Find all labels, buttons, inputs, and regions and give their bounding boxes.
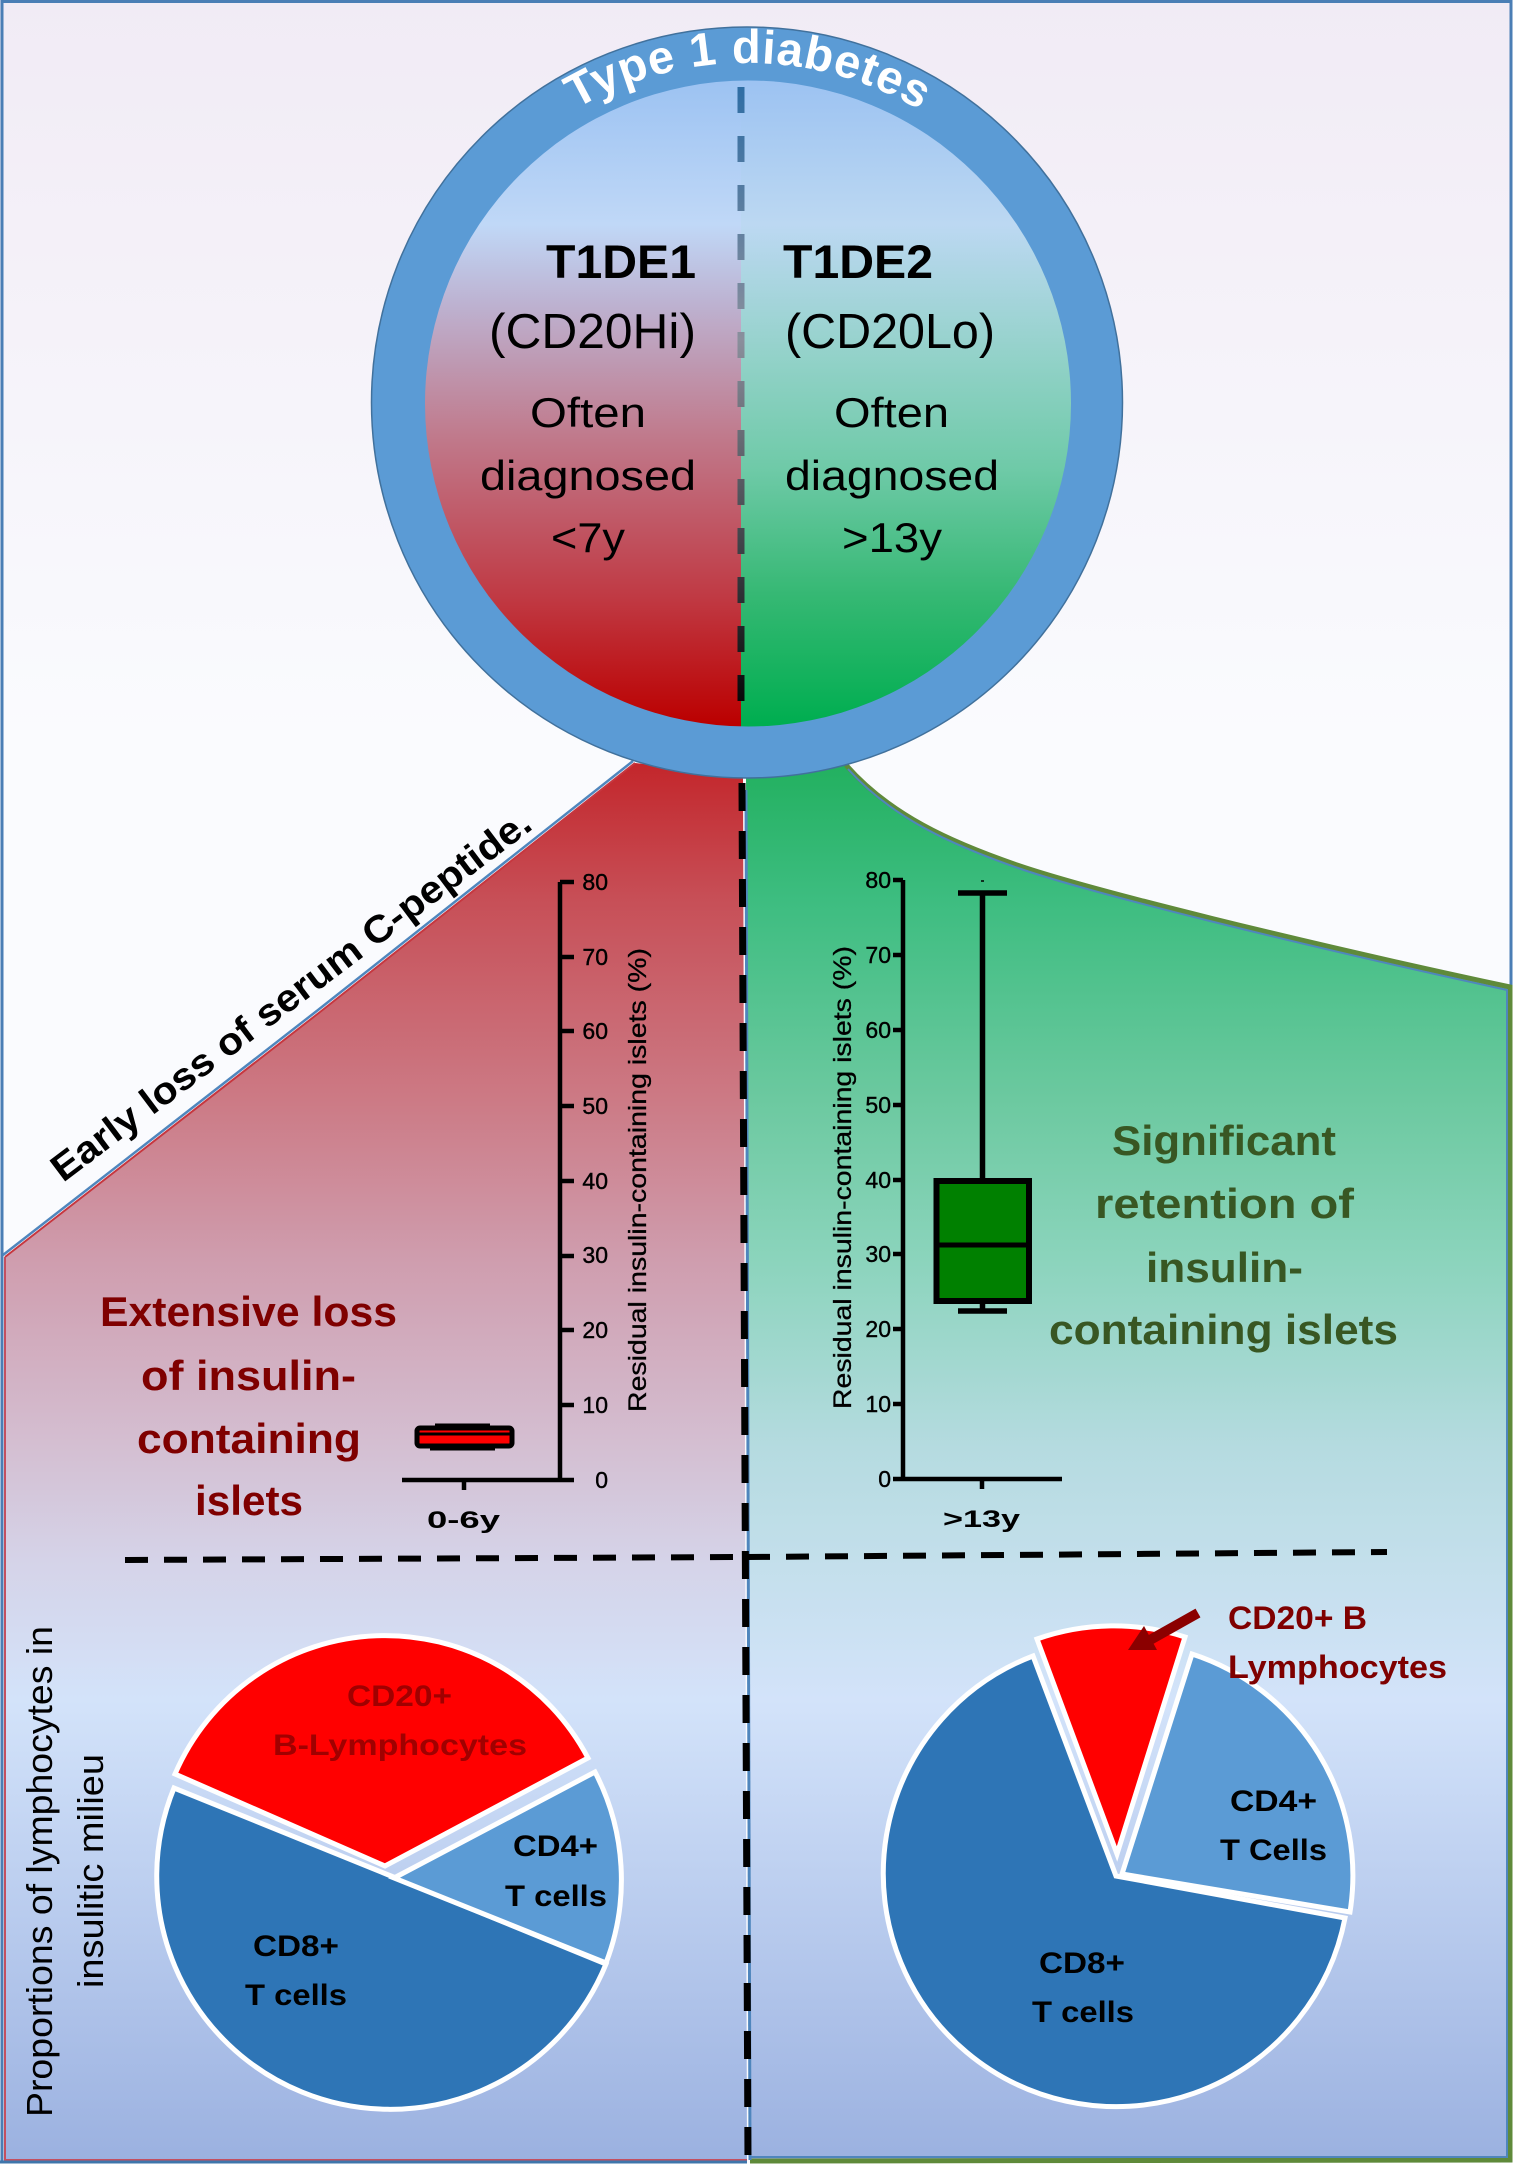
box plot: >13y: Residual insulin-containing islets (%) — [829, 946, 857, 1409]
box plot: >13y: 0 — [878, 1466, 891, 1492]
T1DE2 label: Often — [834, 389, 949, 436]
side label: proportions of lymphocytes: insulitic milieu — [70, 1754, 111, 1988]
pie labels: T1DE2: T cells — [1032, 1996, 1134, 2029]
text: extensive loss: containing — [137, 1415, 361, 1462]
box plot: 0-6y: 80 — [582, 869, 608, 895]
callout: CD20+ B lymphocytes: CD20+ B — [1228, 1600, 1367, 1636]
T1DE2 label: diagnosed — [785, 452, 999, 499]
ring — [372, 27, 1122, 778]
box plot: 0-6y: 10 — [582, 1392, 608, 1418]
pie labels: T1DE1: CD4+ — [513, 1830, 598, 1863]
box plot: 0-6y: 0 — [595, 1467, 608, 1493]
T1DE1 label: diagnosed — [480, 452, 696, 499]
text: significant retention: Significant — [1112, 1117, 1336, 1164]
text: extensive loss: Extensive loss — [100, 1288, 397, 1335]
pie labels: T1DE2: CD8+ — [1039, 1947, 1125, 1980]
callout: CD20+ B lymphocytes: Lymphocytes — [1228, 1649, 1447, 1685]
box plot: >13y — [829, 867, 1062, 1533]
circular title: Type 1 diabetes — [561, 28, 928, 106]
text: extensive loss — [100, 1288, 397, 1524]
text: extensive loss: of insulin- — [141, 1352, 356, 1399]
slice: CD20+ — [175, 1636, 588, 1866]
box plot: >13y: 30 — [865, 1241, 891, 1267]
panel: T1DE1 left — [0, 761, 747, 2162]
T1DE2 label: (CD20Lo) — [785, 305, 995, 359]
text: extensive loss: islets — [195, 1477, 303, 1524]
box plot: >13y: >13y — [943, 1506, 1021, 1533]
T1DE1 label: <7y — [551, 514, 625, 561]
box plot: 0-6y: 20 — [582, 1317, 608, 1343]
box plot: 0-6y — [402, 869, 652, 1534]
pie labels: T1DE1: T cells — [505, 1880, 607, 1913]
panel: T1DE2 right — [746, 765, 1510, 2161]
box plot: >13y: 50 — [865, 1092, 891, 1118]
box plot: >13y: 40 — [865, 1167, 891, 1193]
slice: CD8+ — [883, 1656, 1345, 2107]
callout: CD20+ B lymphocytes — [1228, 1600, 1447, 1685]
box plot: >13y: 20 — [865, 1316, 891, 1342]
pie labels: T1DE1 — [245, 1680, 607, 2012]
text: significant retention: containing islets — [1049, 1306, 1398, 1353]
slice: CD8+ — [157, 1788, 606, 2109]
T1DE2 label: T1DE2 — [783, 235, 933, 288]
box plot: >13y: 80 — [865, 867, 891, 893]
box plot: >13y: 10 — [865, 1391, 891, 1417]
pie labels: T1DE1: B-Lymphocytes — [273, 1729, 527, 1762]
slice: CD20+ — [1037, 1626, 1185, 1854]
pie labels: T1DE2: T Cells — [1220, 1834, 1327, 1867]
callout: early loss of serum C-peptide: Early loss of serum C-peptide. — [43, 802, 540, 1190]
T1DE1 label — [480, 235, 696, 561]
box plot: >13y: 60 — [865, 1017, 891, 1043]
text: significant retention — [1049, 1117, 1398, 1353]
box plot: 0-6y: 0-6y — [427, 1507, 501, 1534]
pie chart: T1DE1 lymphocytes — [157, 1636, 621, 2109]
box plot: >13y: 70 — [865, 942, 891, 968]
box plot: 0-6y: 30 — [582, 1242, 608, 1268]
text: significant retention: retention of — [1095, 1180, 1355, 1227]
side label: proportions of lymphocytes: Proportions of lymphocytes in — [19, 1626, 60, 2117]
circle: Type 1 diabetes — [370, 26, 1124, 779]
pie labels: T1DE2 — [1032, 1785, 1327, 2029]
box plot: 0-6y: 60 — [582, 1018, 608, 1044]
right half: T1DE2 — [741, 78, 1076, 730]
T1DE2 label — [783, 235, 999, 561]
box plot: 0-6y: 40 — [582, 1168, 608, 1194]
side label: proportions of lymphocytes — [19, 1626, 111, 2117]
box plot: 0-6y: Residual insulin-containing islets (%) — [624, 948, 652, 1412]
pie labels: T1DE1: CD8+ — [253, 1930, 339, 1963]
left half: T1DE1 — [420, 78, 741, 730]
text: significant retention: insulin- — [1146, 1244, 1303, 1291]
T1DE1 label: (CD20Hi) — [489, 305, 696, 359]
box plot: 0-6y: 70 — [582, 944, 608, 970]
pie labels: T1DE1: T cells — [245, 1979, 347, 2012]
pie labels: T1DE2: CD4+ — [1230, 1785, 1317, 1818]
slice: CD4+ — [394, 1772, 621, 1963]
box plot: 0-6y: 50 — [582, 1093, 608, 1119]
T1DE1 label: Often — [530, 389, 646, 436]
pie labels: T1DE1: CD20+ — [347, 1680, 452, 1713]
T1DE1 label: T1DE1 — [546, 235, 696, 288]
pie chart: T1DE2 lymphocytes — [883, 1626, 1353, 2107]
T1DE2 label: >13y — [842, 514, 942, 561]
slice: CD4+ — [1122, 1654, 1353, 1912]
arrow: to CD20+ slice — [1128, 1613, 1198, 1650]
